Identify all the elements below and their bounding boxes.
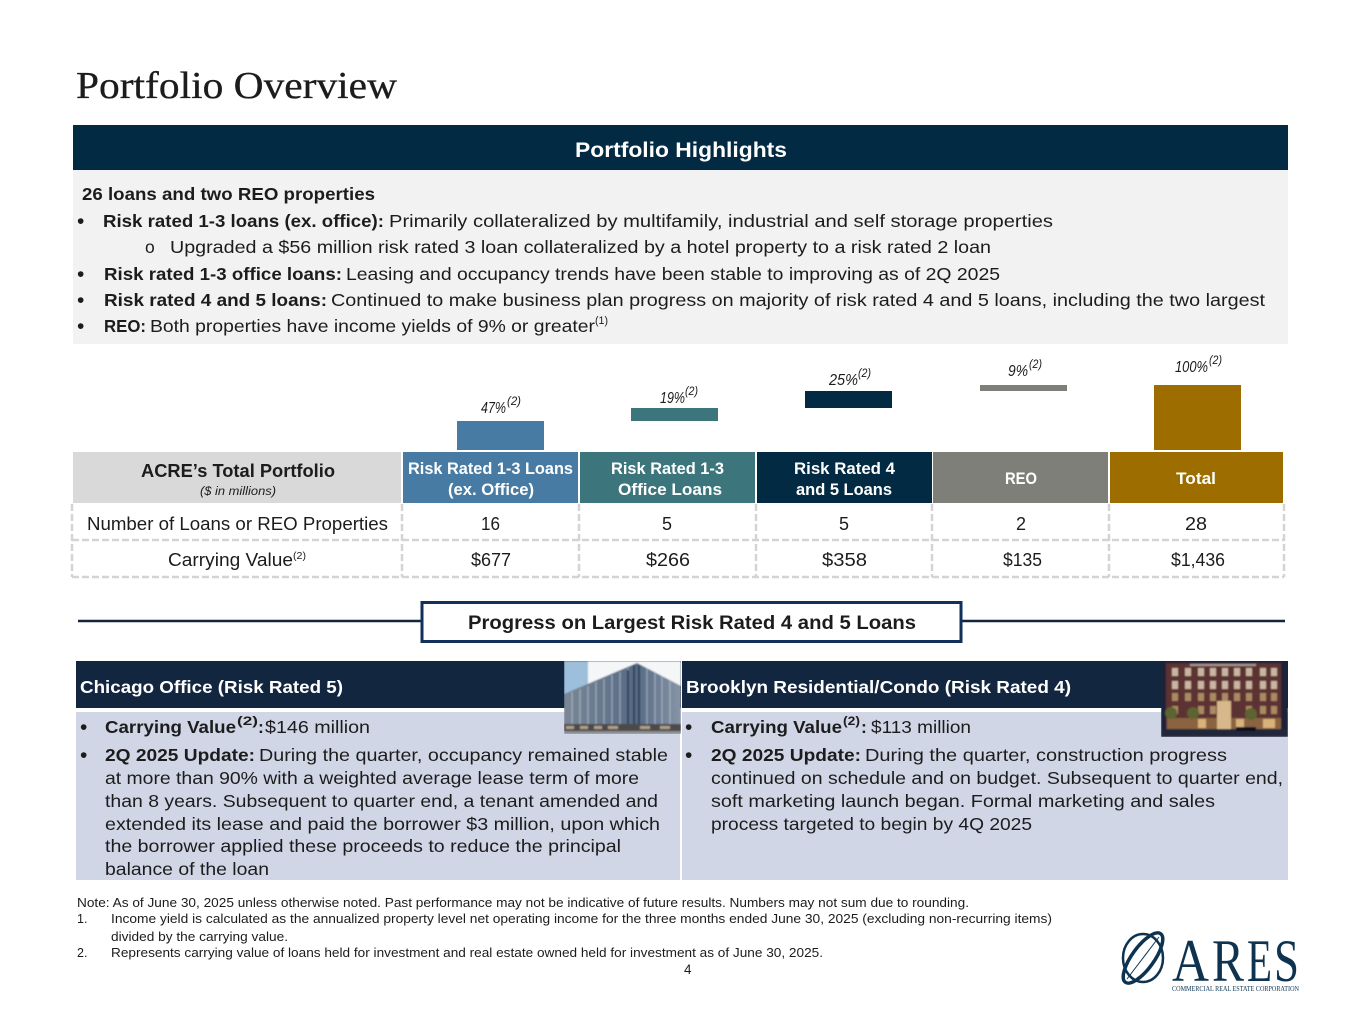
highlights text: • [77, 210, 84, 233]
logo: Ares [1116, 927, 1299, 994]
table header: risk rated 1-3 ex office: (ex. Office) [448, 481, 534, 499]
table header: risk rated 1-3 office: Office Loans [618, 481, 722, 499]
icon: Chicago office building photo [564, 661, 681, 734]
Brooklyn body text: continued on schedule and on budget. Subsequent to quarter end, [711, 768, 1283, 788]
Chicago header bar [76, 661, 681, 708]
highlights text: • [77, 289, 84, 312]
highlights heading: Portfolio Highlights [575, 139, 787, 162]
percentage labels: 19% [660, 390, 685, 407]
table header: label cell [73, 452, 401, 503]
bar: risk rated 1-3 office [631, 408, 718, 421]
logo wordmark [1172, 928, 1299, 994]
Brooklyn body text [685, 714, 1283, 834]
logo wordmark: A [1172, 928, 1209, 994]
table header: risk rated 4 and 5 [757, 452, 932, 503]
Chicago body text: (2) [237, 714, 258, 728]
percentage labels: 100% [1175, 359, 1208, 376]
table header: risk rated 1-3 office [580, 452, 755, 503]
table: ACRE's total portfolio [72, 452, 1284, 577]
footnotes: 2. [77, 946, 87, 960]
icon: Ares orbit mark [1116, 927, 1170, 989]
table row: carrying value: $135 [1003, 550, 1042, 570]
bar: risk rated 1-3 ex office [457, 421, 544, 450]
table row: number of loans: 28 [1185, 514, 1207, 534]
bar chart: portfolio share [457, 355, 1241, 450]
Brooklyn header bar [682, 661, 1288, 708]
highlights text: Risk rated 1-3 office loans: [104, 264, 342, 284]
table header: risk rated 4 and 5: and 5 Loans [796, 481, 892, 499]
table row: carrying value: (2) [293, 551, 306, 562]
highlights text: Risk rated 1-3 loans (ex. office): [103, 211, 384, 231]
panel: Brooklyn residential/condo [682, 661, 1288, 880]
table header: REO [933, 452, 1108, 503]
table header: REO: REO [1005, 470, 1037, 488]
Chicago body text: at more than 90% with a weighted average lease term of more [105, 768, 639, 788]
Chicago body text: balance of the loan [105, 859, 269, 879]
Brooklyn body text: Carrying Value [711, 717, 842, 737]
table row: carrying value: $677 [471, 550, 511, 570]
highlights text: (1) [595, 315, 608, 327]
percentage labels [481, 355, 1222, 417]
bar: REO [980, 385, 1067, 391]
panel: Chicago office [76, 661, 681, 880]
table row: number of loans: 5 [839, 514, 849, 534]
percentage labels: (2) [507, 396, 521, 408]
Brooklyn body text: soft marketing launch began. Formal marketing and sales [711, 791, 1215, 811]
Brooklyn body text: (2) [843, 714, 860, 728]
highlights text: Leasing and occupancy trends have been stable to improving as of 2Q 2025 [346, 264, 1000, 284]
highlights background [73, 170, 1288, 344]
table row: carrying value: Carrying Value [168, 550, 293, 570]
Brooklyn body text: • [685, 716, 692, 739]
highlights text: Primarily collateralized by multifamily, industrial and self storage properties [389, 211, 1053, 231]
Chicago body text: extended its lease and paid the borrower $3 million, upon which [105, 814, 660, 834]
Chicago body text [80, 714, 668, 879]
table header: risk rated 1-3 ex office [403, 452, 578, 503]
page number: 4 [684, 962, 692, 977]
highlights header bar [73, 125, 1288, 170]
highlights text: • [77, 263, 84, 286]
Brooklyn heading: Brooklyn Residential/Condo (Risk Rated 4) [686, 677, 1071, 697]
Chicago body background [76, 712, 680, 880]
logo wordmark: S [1274, 928, 1299, 994]
table header: risk rated 1-3 office: Risk Rated 1-3 [611, 460, 724, 478]
section divider banner: Progress on Largest Risk Rated 4 and 5 Loans [468, 613, 916, 634]
Chicago heading: Chicago Office (Risk Rated 5) [80, 677, 343, 697]
Brooklyn body text: 2Q 2025 Update: [711, 745, 861, 765]
table header: risk rated 1-3 ex office: Risk Rated 1-3 Loans [408, 460, 573, 478]
icon: Brooklyn building photo [1161, 662, 1288, 737]
Chicago body text: Carrying Value [105, 717, 236, 737]
percentage labels: (2) [685, 386, 698, 398]
logo wordmark: E [1247, 928, 1272, 994]
table header: label cell: ($ in millions) [200, 484, 276, 498]
highlights text: • [77, 315, 84, 338]
bar: total [1154, 385, 1241, 450]
Brooklyn body text: • [685, 744, 692, 767]
table row: carrying value: $266 [646, 550, 690, 570]
Chicago body text: than 8 years. Subsequent to quarter end, a tenant amended and [105, 791, 658, 811]
Chicago body text: : [258, 717, 264, 737]
footnotes: 1. [77, 912, 87, 926]
logo wordmark: R [1212, 928, 1244, 994]
highlights text: Upgraded a $56 million risk rated 3 loan collateralized by a hotel property to a risk rated 2 loan [170, 237, 991, 257]
Chicago body text: the borrower applied these proceeds to reduce the principal [105, 836, 621, 856]
Brooklyn body text: process targeted to begin by 4Q 2025 [711, 814, 1032, 834]
footnotes: Income yield is calculated as the annualized property level net operating income for the three months ended June 30, 2025 (excluding non-recurring items) [111, 912, 1052, 926]
Chicago body text: • [80, 744, 87, 767]
highlights text: 26 loans and two REO properties [82, 184, 375, 204]
table header: label cell: ACRE’s Total Portfolio [141, 461, 335, 481]
table row: number of loans [87, 514, 1207, 534]
footnotes: divided by the carrying value. [111, 930, 288, 944]
highlights text: Risk rated 4 and 5 loans: [104, 290, 327, 310]
table row: number of loans: 16 [481, 514, 500, 534]
Chicago body text: $146 million [265, 717, 370, 737]
table row: number of loans: 2 [1016, 514, 1026, 534]
Brooklyn body text: $113 million [871, 717, 971, 737]
highlights text [77, 184, 1265, 338]
percentage labels: 47% [481, 400, 506, 417]
footnotes: Note: As of June 30, 2025 unless otherwise noted. Past performance may not be indicative of future results. Numbers may not sum due to rounding. [77, 896, 969, 910]
Chicago body text: 2Q 2025 Update: [105, 745, 255, 765]
bar: risk rated 4 and 5 [805, 391, 892, 408]
table header: risk rated 4 and 5: Risk Rated 4 [794, 460, 896, 478]
table row: carrying value [168, 550, 1225, 570]
Brooklyn body text: During the quarter, construction progress [865, 745, 1227, 765]
percentage labels: (2) [1209, 355, 1222, 367]
percentage labels: 25% [828, 372, 858, 389]
panel: portfolio highlights [73, 125, 1288, 344]
percentage labels: (2) [1029, 359, 1042, 371]
footnotes [77, 896, 1052, 960]
highlights text: Continued to make business plan progress on majority of risk rated 4 and 5 loans, including the two largest [331, 290, 1265, 310]
percentage labels: 9% [1008, 363, 1028, 380]
footnotes: Represents carrying value of loans held for investment and real estate owned held for investment as of June 30, 2025. [111, 946, 823, 960]
highlights text: Both properties have income yields of 9% or greater [150, 316, 595, 336]
table header: total [1110, 452, 1283, 503]
highlights text: REO: [104, 316, 146, 336]
logo tagline: COMMERCIAL REAL ESTATE CORPORATION [1172, 985, 1299, 993]
Chicago body text: • [80, 716, 87, 739]
highlights text: o [145, 237, 155, 257]
title: Portfolio Overview [76, 65, 398, 107]
table header: total: Total [1176, 470, 1216, 488]
percentage labels: (2) [858, 368, 871, 380]
Brooklyn body text: : [861, 717, 867, 737]
Brooklyn body background [682, 712, 1288, 880]
section divider banner [78, 602, 1285, 642]
table row: number of loans: Number of Loans or REO Properties [87, 514, 388, 534]
table row: carrying value: $1,436 [1171, 550, 1225, 570]
Chicago body text: During the quarter, occupancy remained stable [259, 745, 668, 765]
table row: number of loans: 5 [662, 514, 672, 534]
table row: carrying value: $358 [822, 550, 867, 570]
